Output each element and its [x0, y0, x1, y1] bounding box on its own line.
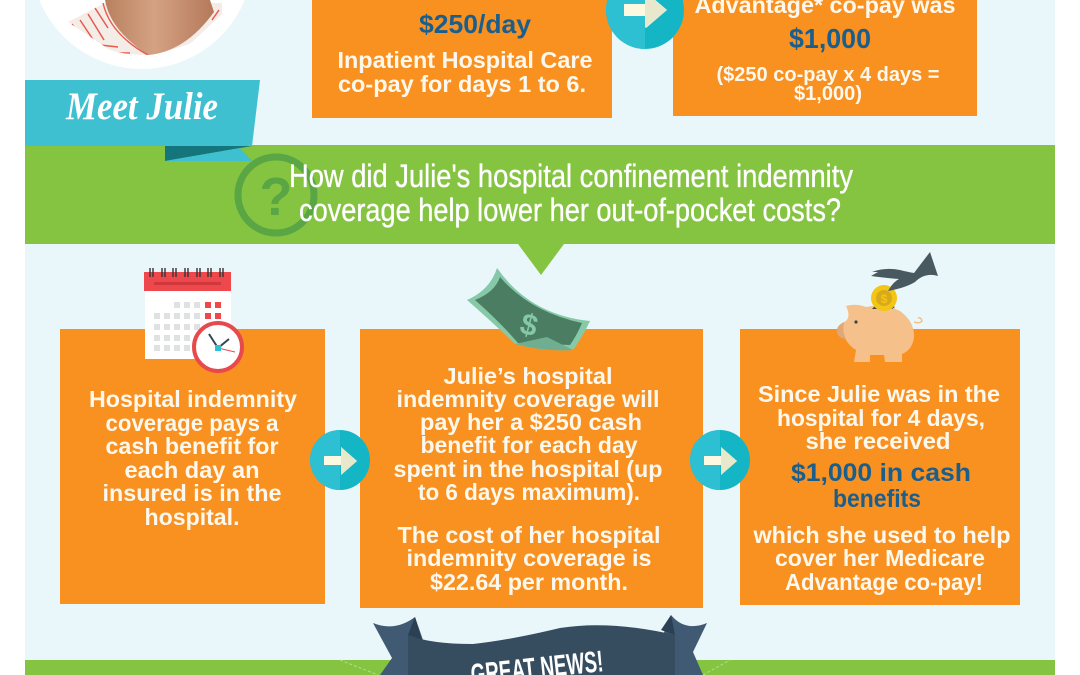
panel: cash received: which she used to help [752, 522, 1010, 548]
panel: inpatient co-pay: $250/day [419, 9, 532, 39]
panel: cash received [740, 329, 1020, 605]
panel: cash benefit explanation: each day an [124, 457, 260, 483]
banner: Meet Julie: Meet Julie [65, 85, 218, 128]
heading: question: coverage help lower her out-of-pocket costs? [299, 192, 841, 228]
heading: question [289, 158, 853, 228]
panel: cash received: Advantage co-pay! [785, 569, 983, 595]
panel: cash benefit explanation: hospital. [144, 504, 240, 530]
icon: calendar with clock [144, 268, 242, 371]
heading: question: How did Julie's hospital confinement indemnity [289, 158, 853, 194]
green question band [25, 145, 1055, 275]
bottom green band [25, 660, 1055, 675]
panel: cash benefit explanation: cash benefit for [106, 433, 279, 459]
banner: Meet Julie [25, 80, 260, 161]
icon: dollar bill: $ [517, 307, 542, 344]
panel: cash received: cover her Medicare [775, 545, 985, 571]
panel: total co-pay: $1,000) [794, 83, 862, 105]
panel: cash received: $1,000 in cash [791, 459, 971, 487]
panel: Julie's coverage: indemnity coverage is [406, 545, 652, 571]
ribbon: great news [373, 615, 707, 675]
panel: cash benefit explanation: Hospital indemnity [89, 386, 297, 412]
panel: cash received: hospital for 4 days, [777, 405, 985, 431]
arrow: top [606, 0, 684, 49]
panel: Julie's coverage: $22.64 per month. [430, 569, 628, 595]
photo of Julie [31, 0, 253, 69]
panel: cash benefit explanation [60, 329, 325, 604]
panel: Julie's coverage: spent in the hospital (up [394, 456, 662, 482]
icon: piggy bank with hand and coin: $ [881, 292, 888, 306]
icon: piggy bank with hand and coin [837, 252, 938, 362]
panel: cash received: Since Julie was in the [758, 381, 1000, 407]
panel: total co-pay: $1,000 [789, 23, 871, 54]
panel: Julie's coverage: indemnity coverage will [396, 386, 660, 412]
panel: Julie's coverage: to 6 days maximum). [418, 479, 640, 505]
panel: inpatient co-pay [312, 0, 612, 118]
panel: cash benefit explanation: insured is in the [102, 480, 282, 506]
icon: question mark [238, 157, 314, 233]
panel: cash benefit explanation: coverage pays a [106, 410, 279, 436]
arrow: first to second panel [310, 430, 370, 490]
panel: inpatient co-pay: Inpatient Hospital Care [338, 47, 592, 73]
panel: cash received: she received [806, 428, 950, 454]
panel: inpatient co-pay: co-pay for days 1 to 6. [338, 71, 586, 97]
panel: Julie's coverage: The cost of her hospital [398, 522, 660, 548]
panel: Julie's coverage: Julie’s hospital [444, 363, 612, 389]
panel: total co-pay [673, 0, 977, 116]
arrow: second to third panel [690, 430, 750, 490]
panel: Julie's coverage [360, 329, 703, 608]
panel: total co-pay: ($250 co-pay x 4 days = [716, 64, 940, 86]
panel: cash received: benefits [833, 485, 921, 513]
panel: Julie's coverage: benefit for each day [420, 432, 638, 458]
icon: dollar bill [467, 268, 590, 350]
panel: Julie's coverage: pay her a $250 cash [420, 409, 642, 435]
icon: question mark: ? [260, 167, 292, 227]
